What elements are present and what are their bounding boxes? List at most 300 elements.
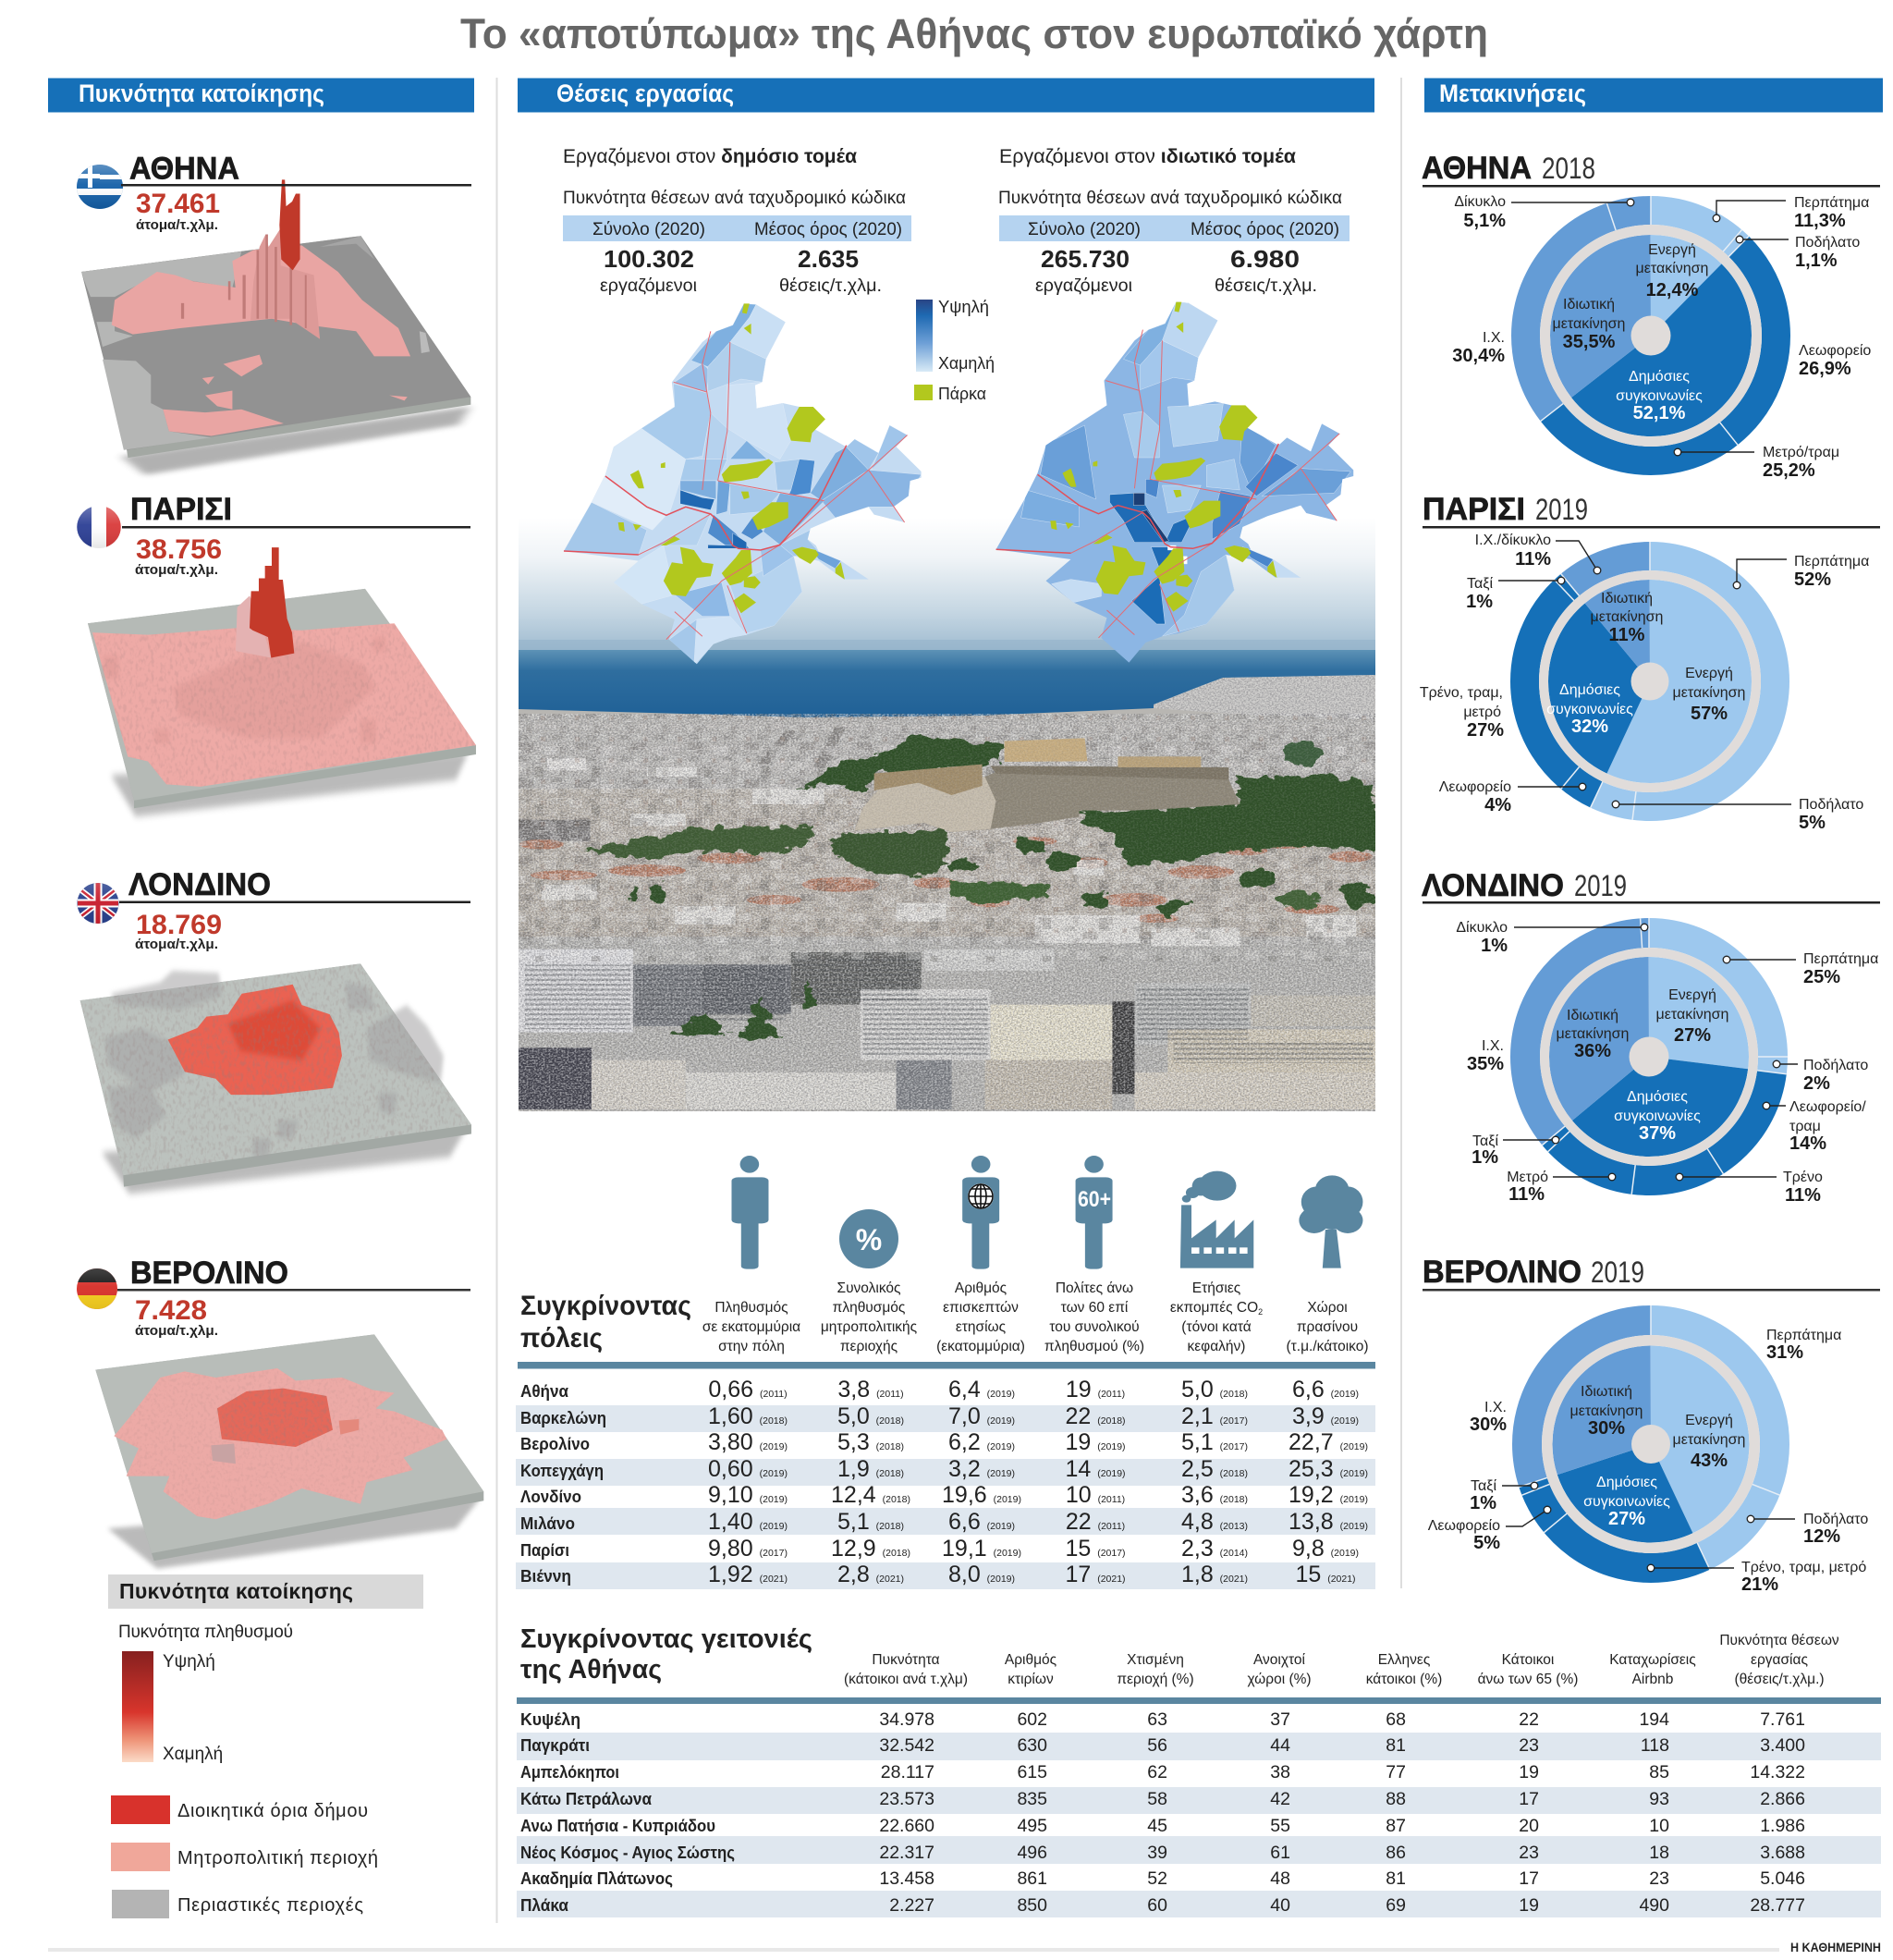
table rows: 68 [1386, 1709, 1406, 1730]
table rows: Αθήνα [520, 1382, 568, 1401]
table rows: 2,5 (2018) [1181, 1456, 1248, 1482]
legend: job density: Υψηλή [938, 298, 989, 316]
table rows: 17 [1519, 1868, 1539, 1889]
table rows: 1,92 (2021) [708, 1562, 788, 1587]
block: private sector: 265.730 [1041, 245, 1130, 273]
donut: London: 2019 [1574, 869, 1627, 902]
column headers: Αριθμός [955, 1280, 1007, 1296]
header: jobs: Θέσεις εργασίας [556, 80, 734, 107]
donut: London: 27% [1674, 1025, 1711, 1046]
photo: Athens skyline with Acropolis [519, 518, 1375, 1111]
block: private sector: 6.980 [1230, 245, 1300, 273]
donut: Paris: Δημόσιες [1559, 682, 1620, 698]
column headers: Χτισμένη [1127, 1652, 1184, 1668]
donut: Berlin: Λεωφορείο [1428, 1518, 1500, 1534]
donut: Paris: Ενεργή [1685, 666, 1733, 681]
city header: Berlin: 7.428 [135, 1295, 207, 1326]
column headers: πληθυσμού (%) [1044, 1339, 1144, 1354]
table rows: 22 (2011) [1066, 1509, 1125, 1535]
table rows: 1,8 (2021) [1181, 1562, 1248, 1587]
table rows: 12,4 (2018) [831, 1482, 910, 1508]
header: residential density [48, 78, 474, 113]
donut: Athens: μετακίνηση [1636, 261, 1708, 276]
donut: Berlin: Τρένο, τραμ, μετρό [1741, 1560, 1866, 1575]
donut: Paris: Τρένο, τραμ, [1420, 685, 1503, 701]
donut: London: Περπάτημα [1803, 951, 1878, 967]
city header: Paris [77, 492, 470, 578]
table rows: 69 [1386, 1895, 1406, 1916]
donut: Paris: 5% [1799, 813, 1826, 833]
icon: person 60+: 60+ [1078, 1187, 1111, 1212]
block: private sector [998, 146, 1350, 296]
donut: Berlin: 5% [1473, 1533, 1500, 1553]
table rows: 22 (2018) [1065, 1403, 1126, 1429]
donut: Athens: 12,4% [1646, 280, 1699, 300]
table rows: 19 (2011) [1066, 1377, 1125, 1403]
icon: percent circle: % [856, 1223, 882, 1256]
table rows: 93 [1649, 1789, 1669, 1809]
donut: London: Λεωφορείο/ [1789, 1099, 1866, 1115]
donut: Paris: μετακίνηση [1673, 685, 1745, 701]
donut: Paris: 57% [1691, 704, 1728, 724]
table rows: 2,3 (2014) [1181, 1536, 1248, 1562]
table rows: 13,8 (2019) [1288, 1509, 1368, 1535]
donut: Berlin: Δημόσιες [1596, 1475, 1657, 1490]
donut: Paris: 2019 [1535, 493, 1588, 526]
header: residential density: Πυκνότητα κατοίκησης [79, 80, 324, 107]
column headers: Πληθυσμός [714, 1300, 788, 1316]
choropleth map: public sector [564, 303, 922, 664]
column headers: Συνολικός [837, 1280, 900, 1296]
table heading: πόλεις [520, 1323, 603, 1354]
table rows: Νέος Κόσμος - Αγιος Σώστης [520, 1844, 735, 1862]
table rows: 8,0 (2019) [948, 1562, 1015, 1587]
table rows: Βαρκελώνη [520, 1409, 606, 1427]
donut: Athens: ΑΘΗΝΑ [1422, 151, 1532, 186]
table rows: 1,9 (2018) [837, 1456, 904, 1482]
3D map: Paris [88, 547, 476, 816]
donut: London: Ταξί [1472, 1133, 1498, 1149]
table rows: 38 [1270, 1762, 1290, 1782]
donut: Athens: 2018 [1542, 152, 1595, 185]
donut: Athens: 35,5% [1563, 332, 1616, 352]
table rows: Πλάκα [520, 1896, 568, 1915]
title: Το «αποτύπωμα» της Αθήνας στον ευρωπαϊκό χάρτη [460, 10, 1488, 57]
city header: Berlin [77, 1256, 470, 1339]
table rows: 85 [1649, 1762, 1669, 1782]
column headers: άνω των 65 (%) [1478, 1672, 1578, 1687]
donut: London: 35% [1467, 1054, 1504, 1074]
donut: Athens: 11,3% [1794, 211, 1846, 231]
donut: Paris: 27% [1467, 720, 1504, 741]
panel: jobs [516, 78, 1375, 1589]
table rows: 13.458 [879, 1868, 934, 1889]
table rows: 5.046 [1760, 1868, 1805, 1889]
table rows: Κοπεγχάγη [520, 1462, 604, 1480]
block: private sector: Σύνολο (2020) [1028, 220, 1141, 239]
block: public sector: Μέσος όρος (2020) [754, 220, 902, 239]
table rows: 23.573 [879, 1789, 934, 1809]
block: public sector: 2.635 [798, 245, 859, 273]
block: private sector: Πυκνότητα θέσεων ανά ταχυδρομικό κώδικα [998, 189, 1342, 208]
table heading [520, 1291, 691, 1354]
table rows: 86 [1386, 1843, 1406, 1863]
donut: London: 25% [1803, 967, 1840, 987]
table rows: 32.542 [879, 1735, 934, 1756]
icon: percent circle [839, 1209, 898, 1268]
city header: Paris: 38.756 [136, 534, 222, 565]
donut: Paris: 4% [1484, 795, 1511, 815]
table rows: 87 [1386, 1816, 1406, 1836]
header: jobs [518, 78, 1374, 113]
donut: London: 1% [1472, 1147, 1498, 1168]
donut: Paris: μετρό [1463, 704, 1501, 720]
table rows: 39 [1147, 1843, 1167, 1863]
column headers: 2 [1258, 1307, 1263, 1317]
column headers: επισκεπτών [943, 1300, 1019, 1316]
donut: London: μετακίνηση [1557, 1026, 1629, 1042]
icon: person [731, 1156, 768, 1269]
icon: person with globe [962, 1156, 999, 1269]
donut: Paris: Ποδήλατο [1799, 797, 1863, 813]
table rows: 12,9 (2018) [831, 1536, 910, 1562]
table rows: 56 [1147, 1735, 1167, 1756]
column headers [702, 1280, 1368, 1354]
city header: Athens: 37.461 [136, 189, 220, 219]
donut: Paris: 52% [1794, 570, 1831, 590]
block: private sector: θέσεις/τ.χλμ. [1215, 276, 1317, 296]
table rows: 496 [1017, 1843, 1047, 1863]
table rows: 3,9 (2019) [1292, 1403, 1359, 1429]
column headers: εκπομπές CO [1170, 1300, 1258, 1316]
table heading [520, 1624, 812, 1684]
table rows: 118 [1641, 1735, 1669, 1756]
column headers: κάτοικοι (%) [1366, 1672, 1442, 1687]
donut: London: ΛΟΝΔΙΝΟ [1422, 868, 1564, 903]
icon: person 60+ [1076, 1156, 1113, 1269]
table rows: 22.317 [879, 1843, 934, 1863]
flag: France [77, 506, 121, 548]
table rows [520, 1377, 1368, 1587]
column headers: κεφαλήν) [1188, 1339, 1245, 1354]
donut: Athens: Δίκυκλο [1454, 194, 1506, 210]
table rows: 14.322 [1750, 1762, 1805, 1782]
table rows: 18 [1649, 1843, 1669, 1863]
donut: Berlin: Ενεργή [1685, 1413, 1733, 1428]
table rows: 6,2 (2019) [948, 1429, 1015, 1455]
table rows: 5,1 (2018) [837, 1509, 904, 1535]
table rows: Κάτω Πετράλωνα [520, 1790, 652, 1808]
column headers: (θέσεις/τ.χλμ.) [1734, 1672, 1825, 1687]
donut: London: 36% [1574, 1041, 1611, 1061]
table rows: 28.117 [881, 1762, 934, 1782]
table rows: 28.777 [1750, 1895, 1805, 1916]
table rows: Κυψέλη [520, 1710, 580, 1729]
donut: Berlin: 31% [1766, 1342, 1803, 1363]
table rows: 5,0 (2018) [1181, 1377, 1248, 1403]
table rows: 850 [1017, 1895, 1047, 1916]
donut: Paris: 11% [1515, 549, 1551, 570]
table rows: 9,10 (2019) [708, 1482, 788, 1508]
column headers: πρασίνου [1297, 1319, 1358, 1335]
city header: London: άτομα/τ.χλμ. [135, 937, 218, 952]
table rows: 6,6 (2019) [948, 1509, 1015, 1535]
donut: Berlin [1423, 1255, 1880, 1595]
column headers: περιοχής [840, 1339, 898, 1354]
city header: Athens: ΑΘΗΝΑ [129, 152, 239, 187]
donut: Berlin: 12% [1803, 1526, 1840, 1547]
table rows: 1.986 [1760, 1816, 1805, 1836]
donut: Paris: Ιδιωτική [1601, 591, 1653, 606]
table rows: 0,66 (2011) [708, 1377, 788, 1403]
column headers: χώροι (%) [1247, 1672, 1312, 1687]
donut: Berlin: Ιδιωτική [1581, 1384, 1632, 1400]
donut: London: 11% [1785, 1185, 1821, 1206]
column headers: στην πόλη [718, 1339, 785, 1354]
table rows: 10 [1649, 1816, 1669, 1836]
table rows: 15 (2021) [1295, 1562, 1356, 1587]
table rows: 37 [1270, 1709, 1290, 1730]
table rows: 10 (2011) [1066, 1482, 1125, 1508]
table rows: 22 [1519, 1709, 1539, 1730]
donut: Berlin: 30% [1470, 1415, 1507, 1435]
table rows: Παγκράτι [520, 1736, 590, 1755]
column headers: των 60 επί [1061, 1300, 1129, 1316]
table rows: 6,6 (2019) [1292, 1377, 1359, 1403]
column headers: μητροπολιτικής [821, 1319, 917, 1335]
donut: Athens: Ενεργή [1648, 242, 1696, 258]
column headers: Πυκνότητα θέσεων [1719, 1633, 1839, 1648]
table rows: 835 [1017, 1789, 1047, 1809]
table rows: 34.978 [879, 1709, 934, 1730]
city header: London: 18.769 [136, 910, 222, 940]
table rows: Βερολίνο [520, 1435, 590, 1453]
block: public sector: εργαζόμενοι [600, 276, 697, 296]
table rows: 61 [1270, 1843, 1290, 1863]
table rows: 19,2 (2019) [1288, 1482, 1368, 1508]
city header: London [78, 867, 470, 952]
city header: London: ΛΟΝΔΙΝΟ [128, 867, 271, 902]
table rows: Παρίσι [520, 1541, 569, 1560]
city header: Paris: άτομα/τ.χλμ. [135, 562, 218, 578]
donut: Athens: Μετρό/τραμ [1763, 445, 1839, 460]
city header: Paris: ΠΑΡΙΣΙ [130, 492, 232, 527]
block: public sector: 100.302 [604, 245, 694, 273]
table rows [520, 1709, 1805, 1916]
city header: Athens: άτομα/τ.χλμ. [136, 217, 218, 233]
table heading: Συγκρίνοντας [520, 1291, 691, 1321]
table rows: Αμπελόκηποι [520, 1763, 619, 1782]
column headers: Ανοιχτοί [1253, 1652, 1306, 1668]
block: public sector [563, 146, 911, 296]
donut: Berlin: μετακίνηση [1570, 1403, 1643, 1419]
table rows: 88 [1386, 1789, 1406, 1809]
donut: Athens: 30,4% [1452, 346, 1505, 366]
donut: Paris: συγκοινωνίες [1546, 702, 1633, 717]
column headers: Airbnb [1632, 1672, 1673, 1687]
table rows: 7,0 (2019) [948, 1403, 1015, 1429]
table rows: 14 (2019) [1065, 1456, 1126, 1482]
table rows: 495 [1017, 1816, 1047, 1836]
donut: Athens: 26,9% [1799, 359, 1851, 379]
table rows: 1,60 (2018) [708, 1403, 788, 1429]
donut: Berlin: 1% [1470, 1493, 1496, 1513]
column headers: Χώροι [1307, 1300, 1348, 1316]
table rows: 5,3 (2018) [837, 1429, 904, 1455]
column headers: περιοχή (%) [1117, 1672, 1194, 1687]
city header: Berlin: άτομα/τ.χλμ. [135, 1323, 218, 1339]
table rows: 45 [1147, 1816, 1167, 1836]
table rows: 19,1 (2019) [942, 1536, 1021, 1562]
donut: London: Ιδιωτική [1567, 1008, 1618, 1023]
city header: Berlin: ΒΕΡΟΛΙΝΟ [130, 1256, 288, 1291]
table rows: 81 [1386, 1735, 1406, 1756]
donut: Berlin: Ι.Χ. [1484, 1400, 1507, 1415]
table rows: Μιλάνο [520, 1514, 575, 1533]
donut: London: Μετρό [1507, 1170, 1548, 1185]
donut: London: 11% [1508, 1184, 1545, 1205]
donut: London: Ενεργή [1668, 987, 1716, 1003]
table: comparing cities [516, 1156, 1375, 1589]
3D map: London [80, 963, 471, 1194]
table rows: 490 [1639, 1895, 1669, 1916]
table rows: Βιέννη [520, 1567, 571, 1586]
table rows: Ακαδημία Πλάτωνος [520, 1869, 673, 1888]
donut: London: μετακίνηση [1656, 1007, 1728, 1023]
table rows: 77 [1386, 1762, 1406, 1782]
legend: population density [108, 1574, 423, 1918]
table rows: 63 [1147, 1709, 1167, 1730]
table rows: 17 [1519, 1789, 1539, 1809]
column headers: Ελληνες [1378, 1652, 1430, 1668]
donut: London: τραμ [1789, 1119, 1821, 1134]
table rows: 17 (2021) [1065, 1562, 1126, 1587]
table rows: 3,8 (2011) [837, 1377, 904, 1403]
table rows: 52 [1147, 1868, 1167, 1889]
donut: Berlin: 2019 [1591, 1256, 1644, 1289]
donut: London: συγκοινωνίες [1614, 1109, 1701, 1124]
table rows: 5,0 (2018) [837, 1403, 904, 1429]
table rows: 9,80 (2017) [708, 1536, 788, 1562]
donut: London: Δημόσιες [1627, 1089, 1688, 1105]
column headers: (τ.μ./κάτοικο) [1287, 1339, 1368, 1354]
donut: Athens: 52,1% [1633, 403, 1686, 423]
table rows: 194 [1639, 1709, 1669, 1730]
donut: Paris: Ταξί [1467, 576, 1493, 592]
table rows: 630 [1017, 1735, 1047, 1756]
choropleth map: private sector [996, 302, 1353, 663]
donut: Athens: 1,1% [1795, 251, 1838, 271]
column headers: (κάτοικοι ανά τ.χλμ) [844, 1672, 968, 1687]
donut: London [1422, 868, 1880, 1206]
block: private sector: Μέσος όρος (2020) [1191, 220, 1339, 239]
donut: Athens: Λεωφορείο [1799, 343, 1871, 359]
table rows: 22,7 (2019) [1288, 1429, 1368, 1455]
table rows: 1,40 (2019) [708, 1509, 788, 1535]
donut: Berlin: 43% [1691, 1451, 1728, 1471]
table rows: 62 [1147, 1762, 1167, 1782]
donut: Berlin: Περπάτημα [1766, 1328, 1841, 1343]
table rows: 6,4 (2019) [948, 1377, 1015, 1403]
table rows: 60 [1147, 1895, 1167, 1916]
donut: Athens: Ποδήλατο [1795, 235, 1860, 251]
table rows: 22.660 [879, 1816, 934, 1836]
column headers: Αριθμός [1005, 1652, 1056, 1668]
donut: Paris: 1% [1466, 592, 1493, 612]
column headers: ετησίως [956, 1319, 1006, 1335]
donut: Athens: Περπάτημα [1794, 195, 1869, 211]
table rows: 2.866 [1760, 1789, 1805, 1809]
table rows: 19,6 (2019) [942, 1482, 1021, 1508]
table rows: 2,1 (2017) [1181, 1403, 1248, 1429]
table rows: 19 (2019) [1065, 1429, 1126, 1455]
table rows: 15 (2017) [1065, 1536, 1126, 1562]
donut: London: Ι.Χ. [1482, 1038, 1504, 1054]
block: public sector: Πυκνότητα θέσεων ανά ταχυδρομικό κώδικα [563, 189, 906, 208]
donut: Athens: 5,1% [1463, 211, 1506, 231]
donut: Paris: Περπάτημα [1794, 554, 1869, 570]
donut: Berlin: ΒΕΡΟΛΙΝΟ [1423, 1255, 1582, 1290]
donut: Berlin: Ταξί [1471, 1478, 1496, 1494]
table rows: 0,60 (2019) [708, 1456, 788, 1482]
colour scale: Χαμηλή [163, 1745, 223, 1764]
table: comparing Athens neighbourhoods [517, 1624, 1881, 1917]
donut: Paris: 32% [1571, 717, 1608, 737]
3D map: Athens [81, 179, 470, 475]
table rows: 2.227 [889, 1895, 934, 1916]
table rows: 20 [1519, 1816, 1539, 1836]
panel: commuting [1420, 78, 1883, 1595]
table rows: 4,8 (2013) [1181, 1509, 1248, 1535]
legend: population density: Πυκνότητα πληθυσμού [118, 1623, 293, 1642]
donut: London: 2% [1803, 1073, 1830, 1094]
icon: factory [1180, 1171, 1253, 1268]
table heading: Συγκρίνοντας γειτονιές [520, 1624, 812, 1654]
column headers: Κάτοικοι [1502, 1652, 1554, 1668]
legend: population density: Πυκνότητα κατοίκησης [119, 1579, 353, 1603]
donut: Paris: Ι.Χ./δίκυκλο [1475, 533, 1551, 548]
column headers: Πολίτες άνω [1056, 1280, 1133, 1296]
panel: residential density [48, 78, 483, 1918]
colour scale [122, 1651, 223, 1764]
column headers: Πυκνότητα [872, 1652, 940, 1668]
table rows: Λονδίνο [520, 1488, 581, 1506]
table rows: 602 [1017, 1709, 1047, 1730]
donut: Paris: μετακίνηση [1591, 609, 1663, 625]
block: public sector: θέσεις/τ.χλμ. [779, 276, 882, 296]
column headers: σε εκατομμύρια [702, 1319, 800, 1335]
table rows: 3.400 [1760, 1735, 1805, 1756]
table rows: 48 [1270, 1868, 1290, 1889]
table rows: 861 [1017, 1868, 1047, 1889]
flag: Greece [76, 163, 124, 209]
table rows: 3,80 (2019) [708, 1429, 788, 1455]
donut: Berlin: 30% [1588, 1418, 1625, 1439]
column headers: Ετήσιες [1192, 1280, 1240, 1296]
donut: London: Τρένο [1783, 1170, 1823, 1185]
column headers: (εκατομμύρια) [936, 1339, 1025, 1354]
donut: Athens: μετακίνηση [1553, 316, 1625, 332]
legend: job density: Πάρκα [938, 385, 986, 403]
column headers: Καταχωρίσεις [1609, 1652, 1696, 1668]
table rows: 44 [1270, 1735, 1290, 1756]
credit: Η ΚΑΘΗΜΕΡΙΝΗ [1790, 1940, 1881, 1954]
table rows: 5,1 (2017) [1181, 1429, 1248, 1455]
column headers: κτιρίων [1008, 1672, 1054, 1687]
table rows: 55 [1270, 1816, 1290, 1836]
donut: Athens: 25,2% [1763, 460, 1815, 481]
donut: Paris: ΠΑΡΙΣΙ [1423, 492, 1525, 527]
